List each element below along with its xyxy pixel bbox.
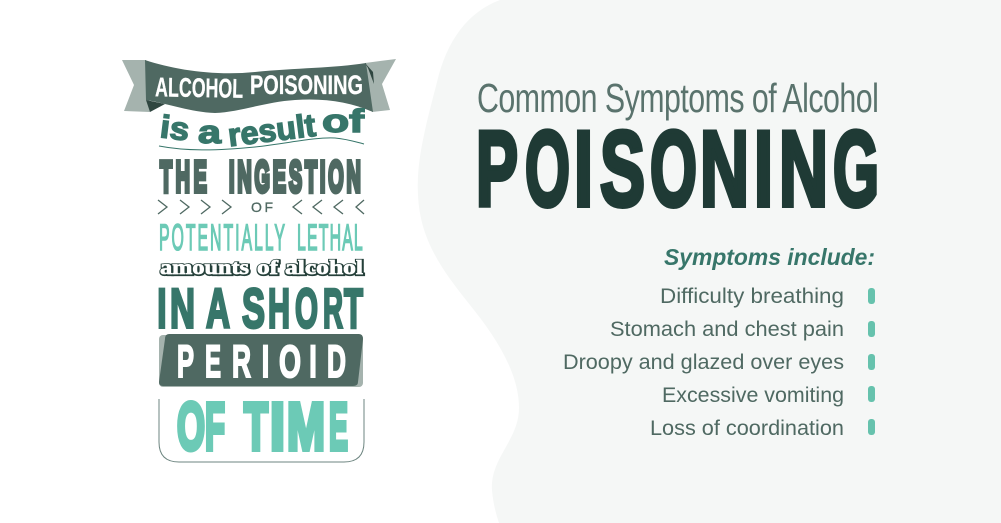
- of time with rounded frame: I: [270, 390, 285, 464]
- line: the ingestion: [160, 153, 361, 202]
- of time with rounded frame: F: [205, 390, 225, 464]
- line: in a short: I: [157, 276, 167, 340]
- symptom 2: Stomach and chest pain: [610, 318, 844, 341]
- period box: R: [232, 336, 251, 387]
- symptom 5: Loss of coordination: [650, 417, 844, 440]
- of time with rounded frame: M: [287, 390, 325, 464]
- line: is a result of: [158, 103, 364, 153]
- period box: I: [262, 336, 269, 387]
- line: amounts of alcohol: amounts: [160, 257, 249, 279]
- line: in a short: O: [295, 276, 318, 340]
- title line 2: I: [754, 108, 773, 228]
- line: in a short: S: [242, 276, 265, 340]
- line: amounts of alcohol: of: [257, 257, 278, 279]
- line: in a short: [157, 276, 363, 340]
- symptoms list: [563, 285, 875, 440]
- symptoms heading: Symptoms include:: [664, 244, 875, 270]
- title line 1: Common Symptoms of Alcohol: [477, 74, 879, 121]
- symptom 3: Droopy and glazed over eyes: [563, 351, 844, 374]
- title line 2: O: [525, 108, 570, 228]
- banner text: [155, 70, 363, 104]
- symptom 1: Difficulty breathing: [660, 285, 844, 308]
- title line 2: I: [574, 108, 593, 228]
- line: is a result of: result: [226, 107, 318, 153]
- line: amounts of alcohol: alcohol: [286, 258, 364, 280]
- title: [476, 74, 879, 228]
- line: amounts of alcohol: [160, 257, 364, 280]
- period box: P: [177, 336, 194, 387]
- line: amounts of alcohol: alcohol: [285, 257, 364, 279]
- background blob panel: [418, 0, 1001, 523]
- of time with rounded frame: E: [329, 390, 348, 464]
- line: in a short: N: [170, 276, 195, 340]
- line: is a result of: a: [198, 114, 221, 150]
- of time with rounded frame: T: [244, 390, 268, 464]
- banner text: POISONING: [250, 70, 363, 100]
- wavy rule: [159, 138, 364, 150]
- ribbon banner: [122, 59, 396, 113]
- line: amounts of alcohol: amounts: [160, 258, 250, 280]
- banner text: ALCOHOL: [155, 72, 243, 104]
- line: in a short: T: [344, 276, 363, 340]
- period box: O: [279, 336, 301, 387]
- line: the ingestion: INGESTION: [229, 153, 361, 202]
- title line 2: S: [600, 108, 645, 228]
- line: chevrons and of: OF: [251, 199, 273, 215]
- symptom 4: Excessive vomiting: [662, 384, 844, 407]
- line: in a short: H: [268, 276, 290, 340]
- period box: D: [327, 336, 346, 387]
- line: potentially lethal: [159, 218, 363, 259]
- title line 2: O: [650, 108, 697, 228]
- title line 2: N: [700, 108, 749, 228]
- title line 2: P: [476, 108, 518, 228]
- line: potentially lethal: POTENTIALLY: [159, 218, 285, 259]
- line: is a result of: is: [158, 108, 191, 148]
- period box: I: [309, 336, 317, 387]
- line: amounts of alcohol: of: [258, 258, 279, 280]
- title line 2: N: [779, 108, 828, 228]
- of time with rounded frame: [159, 390, 364, 464]
- panel: alcohol poisoning typographic lockup: [122, 59, 396, 464]
- line: potentially lethal: LETHAL: [297, 218, 363, 259]
- line: is a result of: of: [322, 103, 364, 139]
- line: chevrons and of: [158, 199, 364, 215]
- of time with rounded frame: O: [177, 390, 205, 464]
- period box: E: [205, 336, 221, 387]
- period box: [159, 334, 363, 387]
- line: the ingestion: THE: [160, 153, 207, 202]
- title line 2: [476, 108, 879, 228]
- line: in a short: A: [206, 276, 230, 340]
- line: in a short: R: [323, 276, 343, 340]
- title line 2: G: [833, 108, 879, 228]
